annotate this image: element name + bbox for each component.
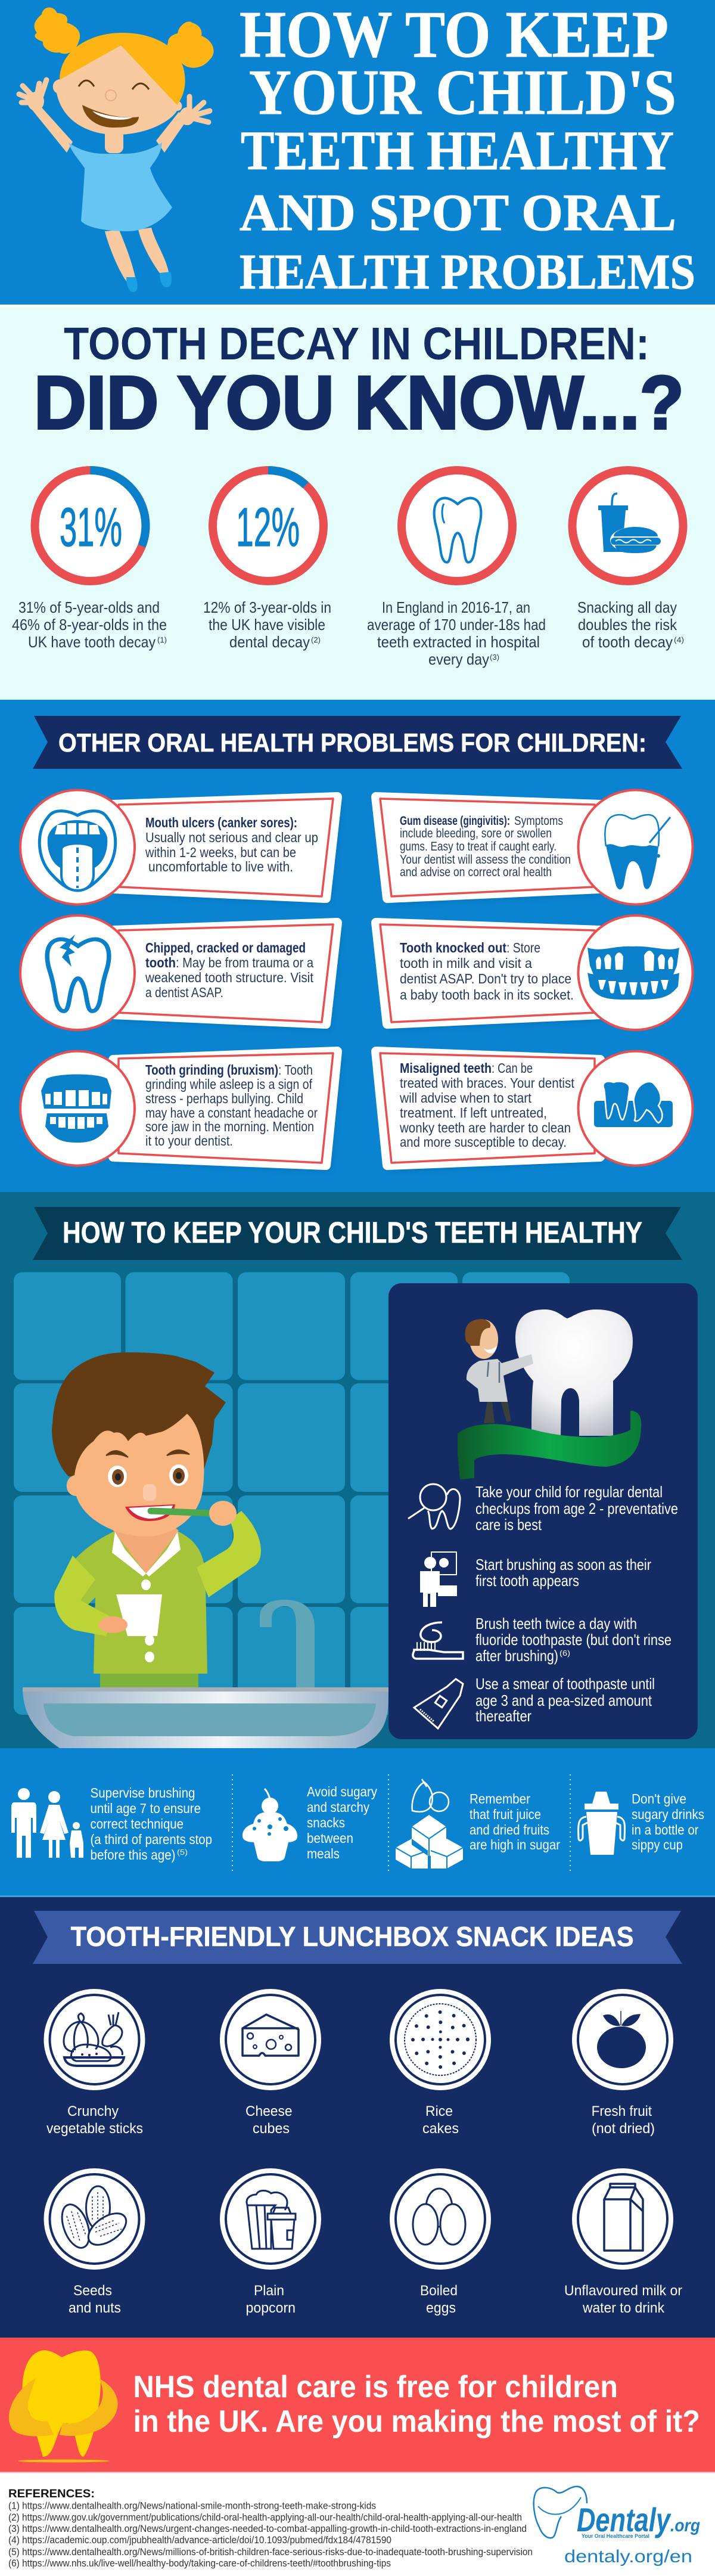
- label: unflavoured milk or water: Unflavoured milk or: [564, 2283, 682, 2299]
- logo: Dentaly.org: [534, 2487, 700, 2539]
- label: seeds and nuts: Seeds: [73, 2283, 112, 2299]
- caption: hospital extractions: [367, 598, 546, 668]
- panel: other oral health problems: [0, 700, 715, 1192]
- text: supervise brushing: until age 7 to ensure: [91, 1801, 201, 1816]
- icon: teeth with a gap: [587, 946, 679, 1000]
- label: cheese cubes: [245, 2103, 292, 2137]
- label: vegetable sticks: Crunchy: [67, 2103, 119, 2119]
- label: plain popcorn: [245, 2283, 296, 2316]
- text: gum disease: gums. Easy to treat if caught early.: [400, 840, 557, 854]
- banner: lunchbox snack ideas: [33, 1911, 682, 1964]
- text: tooth grinding: Tooth grinding (bruxism): [145, 1062, 278, 1078]
- label: vegetable sticks: [46, 2103, 143, 2137]
- snack: cheese cubes: [220, 1989, 321, 2090]
- card: misaligned teeth: [376, 1051, 692, 1170]
- snack: boiled eggs: [390, 2168, 491, 2270]
- icon: magnifier over tooth: [408, 1484, 460, 1529]
- caption: 12 percent: (2): [311, 635, 321, 644]
- title: TEETH HEALTHY: [241, 120, 674, 182]
- banner: how to keep teeth healthy: [33, 1207, 682, 1260]
- icon: family: [11, 1788, 83, 1858]
- caption: snacking: of tooth decay: [582, 633, 673, 651]
- text: fruit juice sugar: and dried fruits: [470, 1822, 549, 1838]
- panel: how to keep teeth healthy: [0, 1192, 715, 1748]
- text: gum disease: [400, 814, 571, 879]
- text: NHS dental care: [133, 2370, 700, 2439]
- label: plain popcorn: Plain: [254, 2283, 284, 2299]
- text: supervise brushing: (5): [177, 1848, 188, 1857]
- panel: tooth decay did you know: [0, 307, 715, 700]
- text: no sugary drinks in bottle: [632, 1791, 704, 1852]
- panel: footer: [0, 2473, 715, 2576]
- references: (5) https://www.dentalhealth.org/News/millions-of-british-children-face-serious-risks-due-to-inadequate-tooth-brushing-supervision: [8, 2546, 533, 2558]
- card: gum disease: [376, 790, 692, 905]
- text: chipped tooth: weakened tooth structure. Visit: [145, 970, 314, 985]
- panel: dentist advice: [388, 1283, 698, 1739]
- text: supervise brushing: (a third of parents stop: [91, 1832, 212, 1847]
- text: misaligned teeth: wonky teeth are harder to clean: [399, 1120, 571, 1135]
- text: supervise brushing: correct technique: [91, 1816, 184, 1832]
- label: vegetable sticks: vegetable sticks: [46, 2121, 143, 2137]
- text: tooth grinding: grinding while asleep is a sign of: [145, 1076, 313, 1092]
- link: dentaly.org/en: dentaly.org/en: [564, 2547, 692, 2566]
- label: unflavoured milk or water: [564, 2283, 682, 2316]
- icon: toothpaste tube: [414, 1679, 463, 1728]
- text: gum disease: Symptoms: [514, 814, 563, 828]
- caption: snacking: (4): [674, 635, 684, 644]
- title: [240, 0, 695, 300]
- caption: 31 percent: UK have tooth decay: [28, 633, 156, 651]
- text: fruit juice sugar: are high in sugar: [470, 1837, 560, 1852]
- caption: snacking: [577, 598, 684, 651]
- label: plain popcorn: popcorn: [245, 2300, 296, 2316]
- label: unflavoured milk or water: water to drink: [582, 2300, 665, 2316]
- text: gum disease: include bleeding, sore or swollen: [400, 827, 552, 840]
- caption: snacking: Snacking all day: [577, 598, 677, 616]
- text: tooth grinding: : Tooth: [278, 1062, 313, 1078]
- title: HOW TO KEEP: [240, 0, 669, 72]
- text: no sugary drinks in bottle: sippy cup: [632, 1837, 683, 1852]
- banner: other oral health problems: OTHER ORAL HEALTH PROBLEMS FOR CHILDREN:: [58, 728, 646, 758]
- caption: hospital extractions: teeth extracted in hospital: [377, 633, 540, 651]
- stat: extraction ring with tooth icon: [402, 470, 512, 581]
- text: smear of toothpaste: Use a smear of toothpaste until: [475, 1675, 655, 1693]
- label: fresh fruit: [592, 2103, 655, 2137]
- text: fruit juice sugar: Remember: [470, 1791, 530, 1807]
- caption: hospital extractions: every day: [428, 650, 489, 668]
- bathroom tile wall: [14, 1272, 570, 1715]
- text: supervise brushing: Supervise brushing: [91, 1785, 195, 1801]
- text: brush twice a day: fluoride toothpaste (but don't rinse: [475, 1631, 672, 1649]
- text: tooth grinding: sore jaw in the morning. Mention: [145, 1119, 314, 1134]
- panel: NHS callout: [0, 2338, 715, 2473]
- title: AND SPOT ORAL: [240, 184, 676, 242]
- label: fresh fruit: Fresh fruit: [592, 2103, 652, 2119]
- text: mouth ulcers: within 1-2 weeks, but can be: [145, 845, 296, 860]
- label: boiled eggs: [420, 2283, 458, 2316]
- text: avoid sugary snacks: and starchy: [307, 1799, 369, 1815]
- label: rice cakes: [422, 2103, 459, 2137]
- text: mouth ulcers: [145, 815, 318, 874]
- text: supervise brushing: [91, 1785, 212, 1863]
- text: tooth knocked out: tooth in milk and visit a: [400, 955, 532, 971]
- caption: 31 percent: (1): [157, 635, 167, 644]
- label: boiled eggs: eggs: [426, 2300, 456, 2316]
- text: no sugary drinks in bottle: Don't give: [632, 1791, 686, 1807]
- text: tooth grinding: stress - perhaps bullying. Child: [145, 1091, 303, 1106]
- panel: lunchbox snack ideas: [0, 1897, 715, 2338]
- text: avoid sugary snacks: Avoid sugary: [307, 1784, 377, 1799]
- text: mouth ulcers: Usually not serious and clear up: [145, 830, 318, 845]
- stat: 31 percent ring: 31%: [60, 497, 122, 558]
- text: regular dental checkups: [475, 1483, 678, 1534]
- text: start brushing: first tooth appears: [475, 1572, 579, 1590]
- text: regular dental checkups: Take your child for regular dental: [475, 1483, 663, 1501]
- icon: misaligned teeth: [594, 1081, 673, 1127]
- references: (3) https://www.dentalhealth.org/News/urgent-changes-needed-to-combat-appalling-growth-in-child-tooth-extractions-in-england: [8, 2523, 527, 2534]
- text: NHS dental care: NHS dental care is free for children: [133, 2370, 618, 2404]
- caption: 12 percent: 12% of 3-year-olds in: [203, 598, 331, 616]
- text: misaligned teeth: treated with braces. Your dentist: [400, 1075, 575, 1091]
- text: chipped tooth: a dentist ASAP.: [145, 985, 223, 1000]
- text: smear of toothpaste: age 3 and a pea-sized amount: [475, 1692, 652, 1709]
- label: rice cakes: cakes: [422, 2121, 459, 2137]
- title: YOUR CHILD'S: [249, 57, 676, 128]
- label: rice cakes: Rice: [425, 2103, 453, 2119]
- caption: 12 percent: dental decay: [229, 633, 310, 651]
- panel: header: [0, 0, 715, 307]
- caption: 31 percent: [12, 598, 167, 651]
- caption: hospital extractions: average of 170 under-18s had: [367, 616, 546, 634]
- text: mouth ulcers: uncomfortable to live with.: [148, 859, 293, 874]
- text: misaligned teeth: Misaligned teeth: [400, 1060, 492, 1076]
- text: misaligned teeth: : Can be: [492, 1060, 533, 1076]
- text: tooth knocked out: : Store: [506, 940, 540, 955]
- text: avoid sugary snacks: [307, 1784, 377, 1861]
- snack: rice cakes: [390, 1989, 491, 2090]
- text: tooth knocked out: Tooth knocked out: [400, 940, 506, 955]
- snack: seeds and nuts: [44, 2168, 145, 2270]
- stat: 12 percent ring: 12%: [236, 497, 300, 558]
- icon: sippy cup: [579, 1792, 625, 1855]
- references: REFERENCES:: [8, 2488, 95, 2500]
- snack: fresh fruit: [572, 1989, 673, 2090]
- references: (6) https://www.nhs.uk/live-well/healthy-body/taking-care-of-childrens-teeth/#toothbrushing-tips: [8, 2558, 391, 2569]
- text: tooth grinding: may have a constant headache or: [145, 1105, 318, 1121]
- text: brush twice a day: Brush teeth twice a day with: [475, 1615, 637, 1632]
- icon: fruit and sugar cubes: [396, 1779, 463, 1869]
- icon: cupcake: [243, 1789, 297, 1861]
- text: chipped tooth: : May be from trauma or a: [176, 955, 313, 970]
- text: start brushing: Start brushing as soon as their: [475, 1556, 651, 1573]
- heading: tooth decay in children: TOOTH DECAY IN CHILDREN:: [64, 318, 649, 370]
- text: brush twice a day: (6): [559, 1649, 570, 1658]
- label: cheese cubes: Cheese: [245, 2103, 292, 2119]
- references: (4) https://academic.oup.com/jpubhealth/advance-article/doi/10.1093/pubmed/fdx184/4781590: [8, 2534, 391, 2546]
- icon: yellow tooth: [9, 2350, 118, 2463]
- caption: 31 percent: 46% of 8-year-olds in the: [12, 616, 167, 634]
- references: (2) https://www.gov.uk/government/publications/child-oral-health-applying-all-our-health/child-oral-health-applying-all-our-health: [8, 2512, 522, 2523]
- text: avoid sugary snacks: meals: [307, 1846, 340, 1861]
- label: seeds and nuts: and nuts: [69, 2300, 121, 2316]
- text: regular dental checkups: checkups from age 2 - preventative: [475, 1500, 678, 1517]
- snack: unflavoured milk or water: [572, 2168, 673, 2270]
- illustration: happy girl: [19, 7, 214, 292]
- label: fresh fruit: (not dried): [592, 2121, 655, 2137]
- text: smear of toothpaste: [475, 1675, 655, 1725]
- card: tooth knocked out: [376, 915, 692, 1030]
- icon: clenched teeth: [41, 1074, 111, 1143]
- text: brush twice a day: [475, 1615, 672, 1665]
- icon: mouth and tongue: [39, 811, 116, 890]
- label: boiled eggs: Boiled: [420, 2283, 458, 2299]
- text: avoid sugary snacks: snacks: [307, 1815, 345, 1830]
- text: mouth ulcers: Mouth ulcers (canker sores):: [145, 815, 297, 830]
- text: misaligned teeth: will advise when to start: [399, 1090, 532, 1106]
- logo: Dentaly.org: Dentaly: [577, 2501, 672, 2538]
- caption: 31 percent: 31% of 5-year-olds and: [18, 598, 160, 616]
- text: gum disease: and advise on correct oral health: [400, 865, 552, 879]
- text: no sugary drinks in bottle: sugary drinks: [632, 1807, 704, 1822]
- heading: did you know: DID YOU KNOW...?: [34, 361, 684, 445]
- card: tooth grinding: [20, 1051, 341, 1170]
- icon: toothbrush: [413, 1622, 463, 1659]
- illustration: boy brushing teeth: [52, 1352, 261, 1690]
- panel: parent tips: [0, 1748, 715, 1898]
- text: chipped tooth: Chipped, cracked or damaged: [145, 940, 306, 955]
- text: chipped tooth: [145, 940, 314, 1000]
- icon: tooth with gum disease: [605, 815, 670, 889]
- text: smear of toothpaste: thereafter: [475, 1707, 531, 1725]
- text: misaligned teeth: and more susceptible to decay.: [400, 1134, 567, 1150]
- text: tooth knocked out: [400, 940, 574, 1003]
- card: mouth ulcers: [20, 790, 341, 905]
- icon: cracked tooth: [47, 935, 109, 1011]
- text: tooth grinding: [145, 1062, 318, 1149]
- references: [8, 2488, 533, 2569]
- caption: 12 percent: [203, 598, 331, 651]
- text: no sugary drinks in bottle: in a bottle or: [632, 1822, 699, 1838]
- illustration: faucet: [260, 1600, 315, 1690]
- label: seeds and nuts: [69, 2283, 121, 2316]
- caption: snacking: doubles the risk: [578, 616, 677, 634]
- icon: person at mirror: [420, 1552, 457, 1607]
- text: misaligned teeth: treatment. If left untreated,: [400, 1105, 547, 1121]
- caption: hospital extractions: (3): [490, 653, 499, 662]
- text: gum disease: Gum disease (gingivitis):: [400, 814, 510, 828]
- text: fruit juice sugar: [470, 1791, 560, 1852]
- text: avoid sugary snacks: between: [307, 1830, 353, 1846]
- text: tooth knocked out: dentist ASAP. Don't try to place: [400, 971, 571, 986]
- snack: vegetable sticks: [44, 1989, 145, 2090]
- text: tooth knocked out: a baby tooth back in its socket.: [400, 987, 574, 1003]
- text: gum disease: Your dentist will assess the condition: [400, 853, 571, 867]
- text: brush twice a day: after brushing): [475, 1647, 558, 1665]
- stat: 12 percent ring: [213, 470, 324, 581]
- snack: plain popcorn: [220, 2168, 321, 2270]
- illustration: sink: [23, 1687, 388, 1748]
- text: chipped tooth: tooth: [145, 955, 176, 970]
- text: tooth grinding: it to your dentist.: [145, 1133, 233, 1149]
- banner: lunchbox snack ideas: TOOTH-FRIENDLY LUNCHBOX SNACK IDEAS: [71, 1921, 634, 1952]
- references: (1) https://www.dentalhealth.org/News/national-smile-month-strong-teeth-make-strong-kids: [8, 2500, 376, 2512]
- logo: Dentaly.org: .org: [670, 2516, 700, 2535]
- text: supervise brushing: before this age): [91, 1847, 175, 1863]
- stat: 31 percent ring: [35, 470, 145, 581]
- text: regular dental checkups: care is best: [475, 1516, 542, 1534]
- illustration: dentist with giant tooth: [458, 1309, 641, 1479]
- card: chipped tooth: [20, 915, 341, 1030]
- text: fruit juice sugar: that fruit juice: [470, 1807, 541, 1822]
- caption: 12 percent: the UK have visible: [209, 616, 325, 634]
- text: misaligned teeth: [399, 1060, 575, 1150]
- logo: Dentaly.org: Your Oral Healthcare Portal: [582, 2533, 649, 2539]
- banner: other oral health problems: [33, 716, 682, 769]
- text: start brushing: [475, 1556, 651, 1590]
- stat: snacking ring with fast food icon: [572, 470, 683, 581]
- caption: hospital extractions: In England in 2016-17, an: [382, 598, 530, 616]
- label: cheese cubes: cubes: [253, 2121, 290, 2137]
